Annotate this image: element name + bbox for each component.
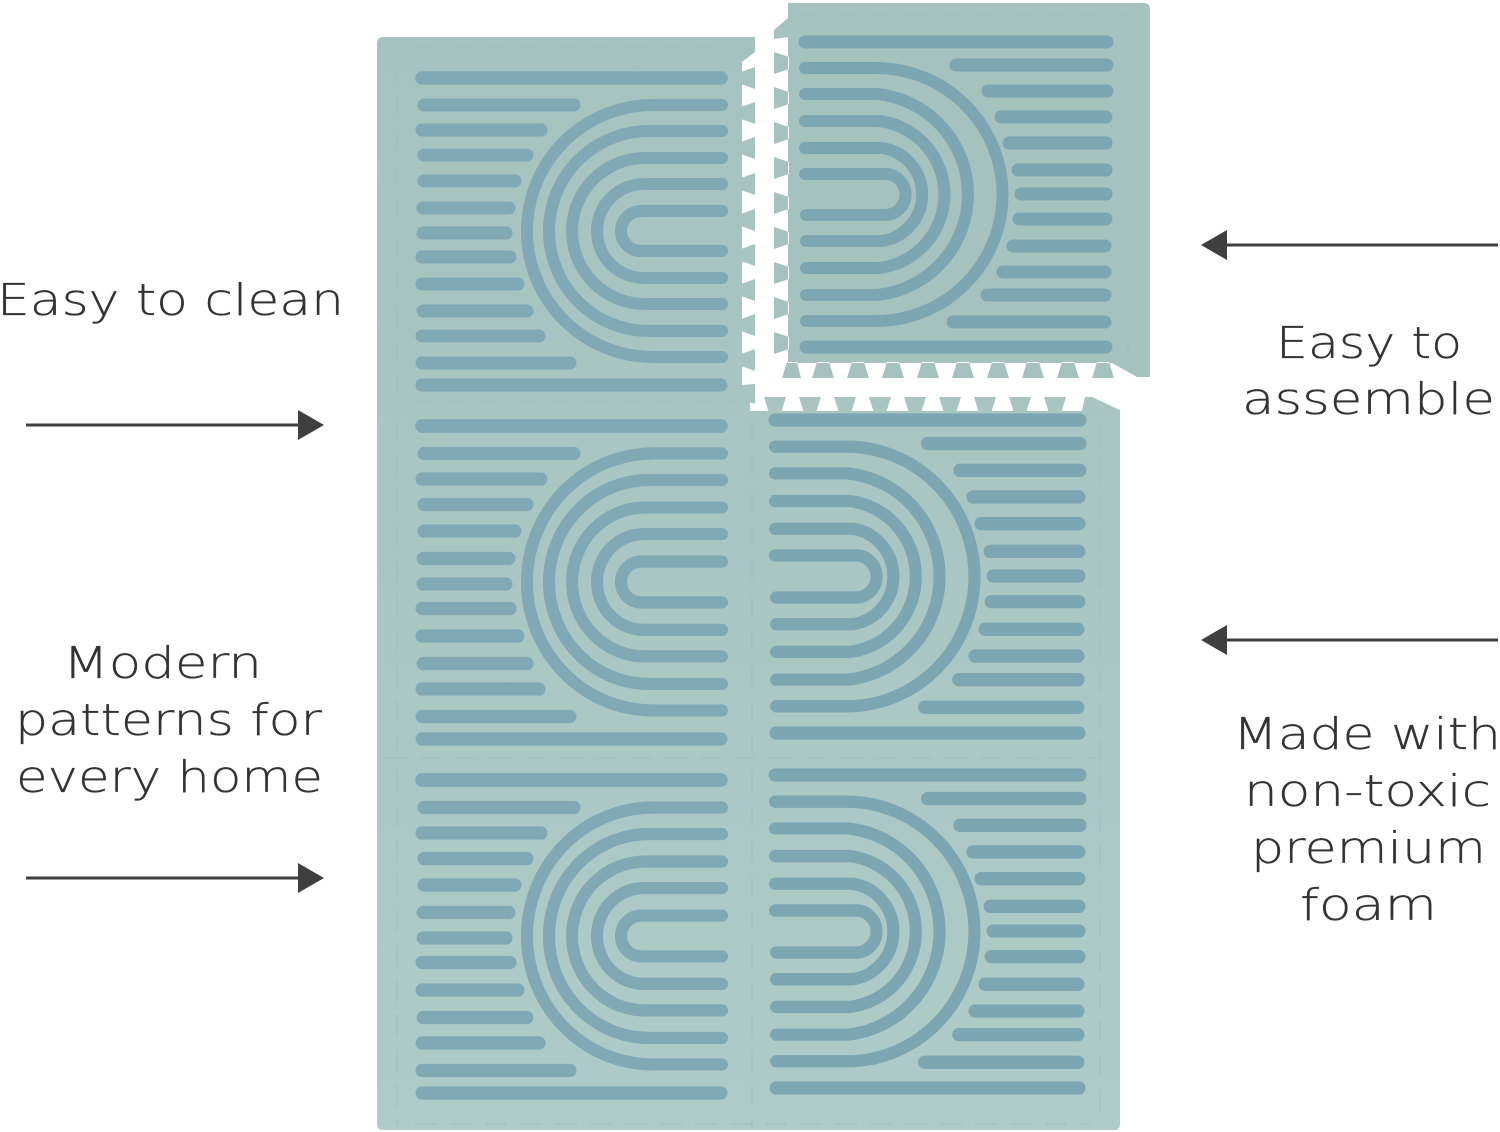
callout: non-toxic foam: non-toxic — [1244, 766, 1491, 817]
callout: non-toxic foam: foam — [1300, 880, 1437, 931]
callout: non-toxic foam: premium — [1251, 823, 1486, 874]
pattern tile: lower right — [775, 775, 1080, 1088]
callout: easy to clean — [0, 275, 344, 440]
label: Modern — [63, 638, 262, 689]
callout: modern patterns: every home — [16, 752, 323, 803]
callout: easy to assemble: assemble — [1242, 374, 1495, 425]
pattern tile: detached — [805, 42, 1107, 347]
arrow right — [26, 410, 324, 440]
faint puzzle seams — [385, 47, 1100, 1128]
arrow right — [26, 863, 324, 893]
label: Made with — [1233, 709, 1500, 760]
callout: non-toxic foam — [1201, 625, 1500, 931]
callout: modern patterns: patterns for — [15, 695, 323, 746]
label: Easy to clean — [0, 275, 344, 326]
mat body with notched edges — [377, 37, 1120, 1130]
pattern tile: middle left — [422, 426, 722, 739]
arrow left — [1201, 230, 1498, 260]
pattern tile: upper left — [422, 78, 722, 385]
play mat: detached corner tile — [774, 3, 1150, 378]
arrow left — [1201, 625, 1498, 655]
tile body with interlocking teeth — [774, 3, 1150, 378]
label: Easy to — [1276, 318, 1462, 369]
callout: easy to assemble — [1201, 230, 1498, 425]
faint puzzle seams — [800, 14, 1130, 350]
play mat: large assembled section — [377, 37, 1120, 1130]
callout: modern patterns — [15, 638, 324, 893]
pattern tile: lower left — [422, 780, 722, 1093]
pattern tile: middle right — [775, 420, 1080, 733]
